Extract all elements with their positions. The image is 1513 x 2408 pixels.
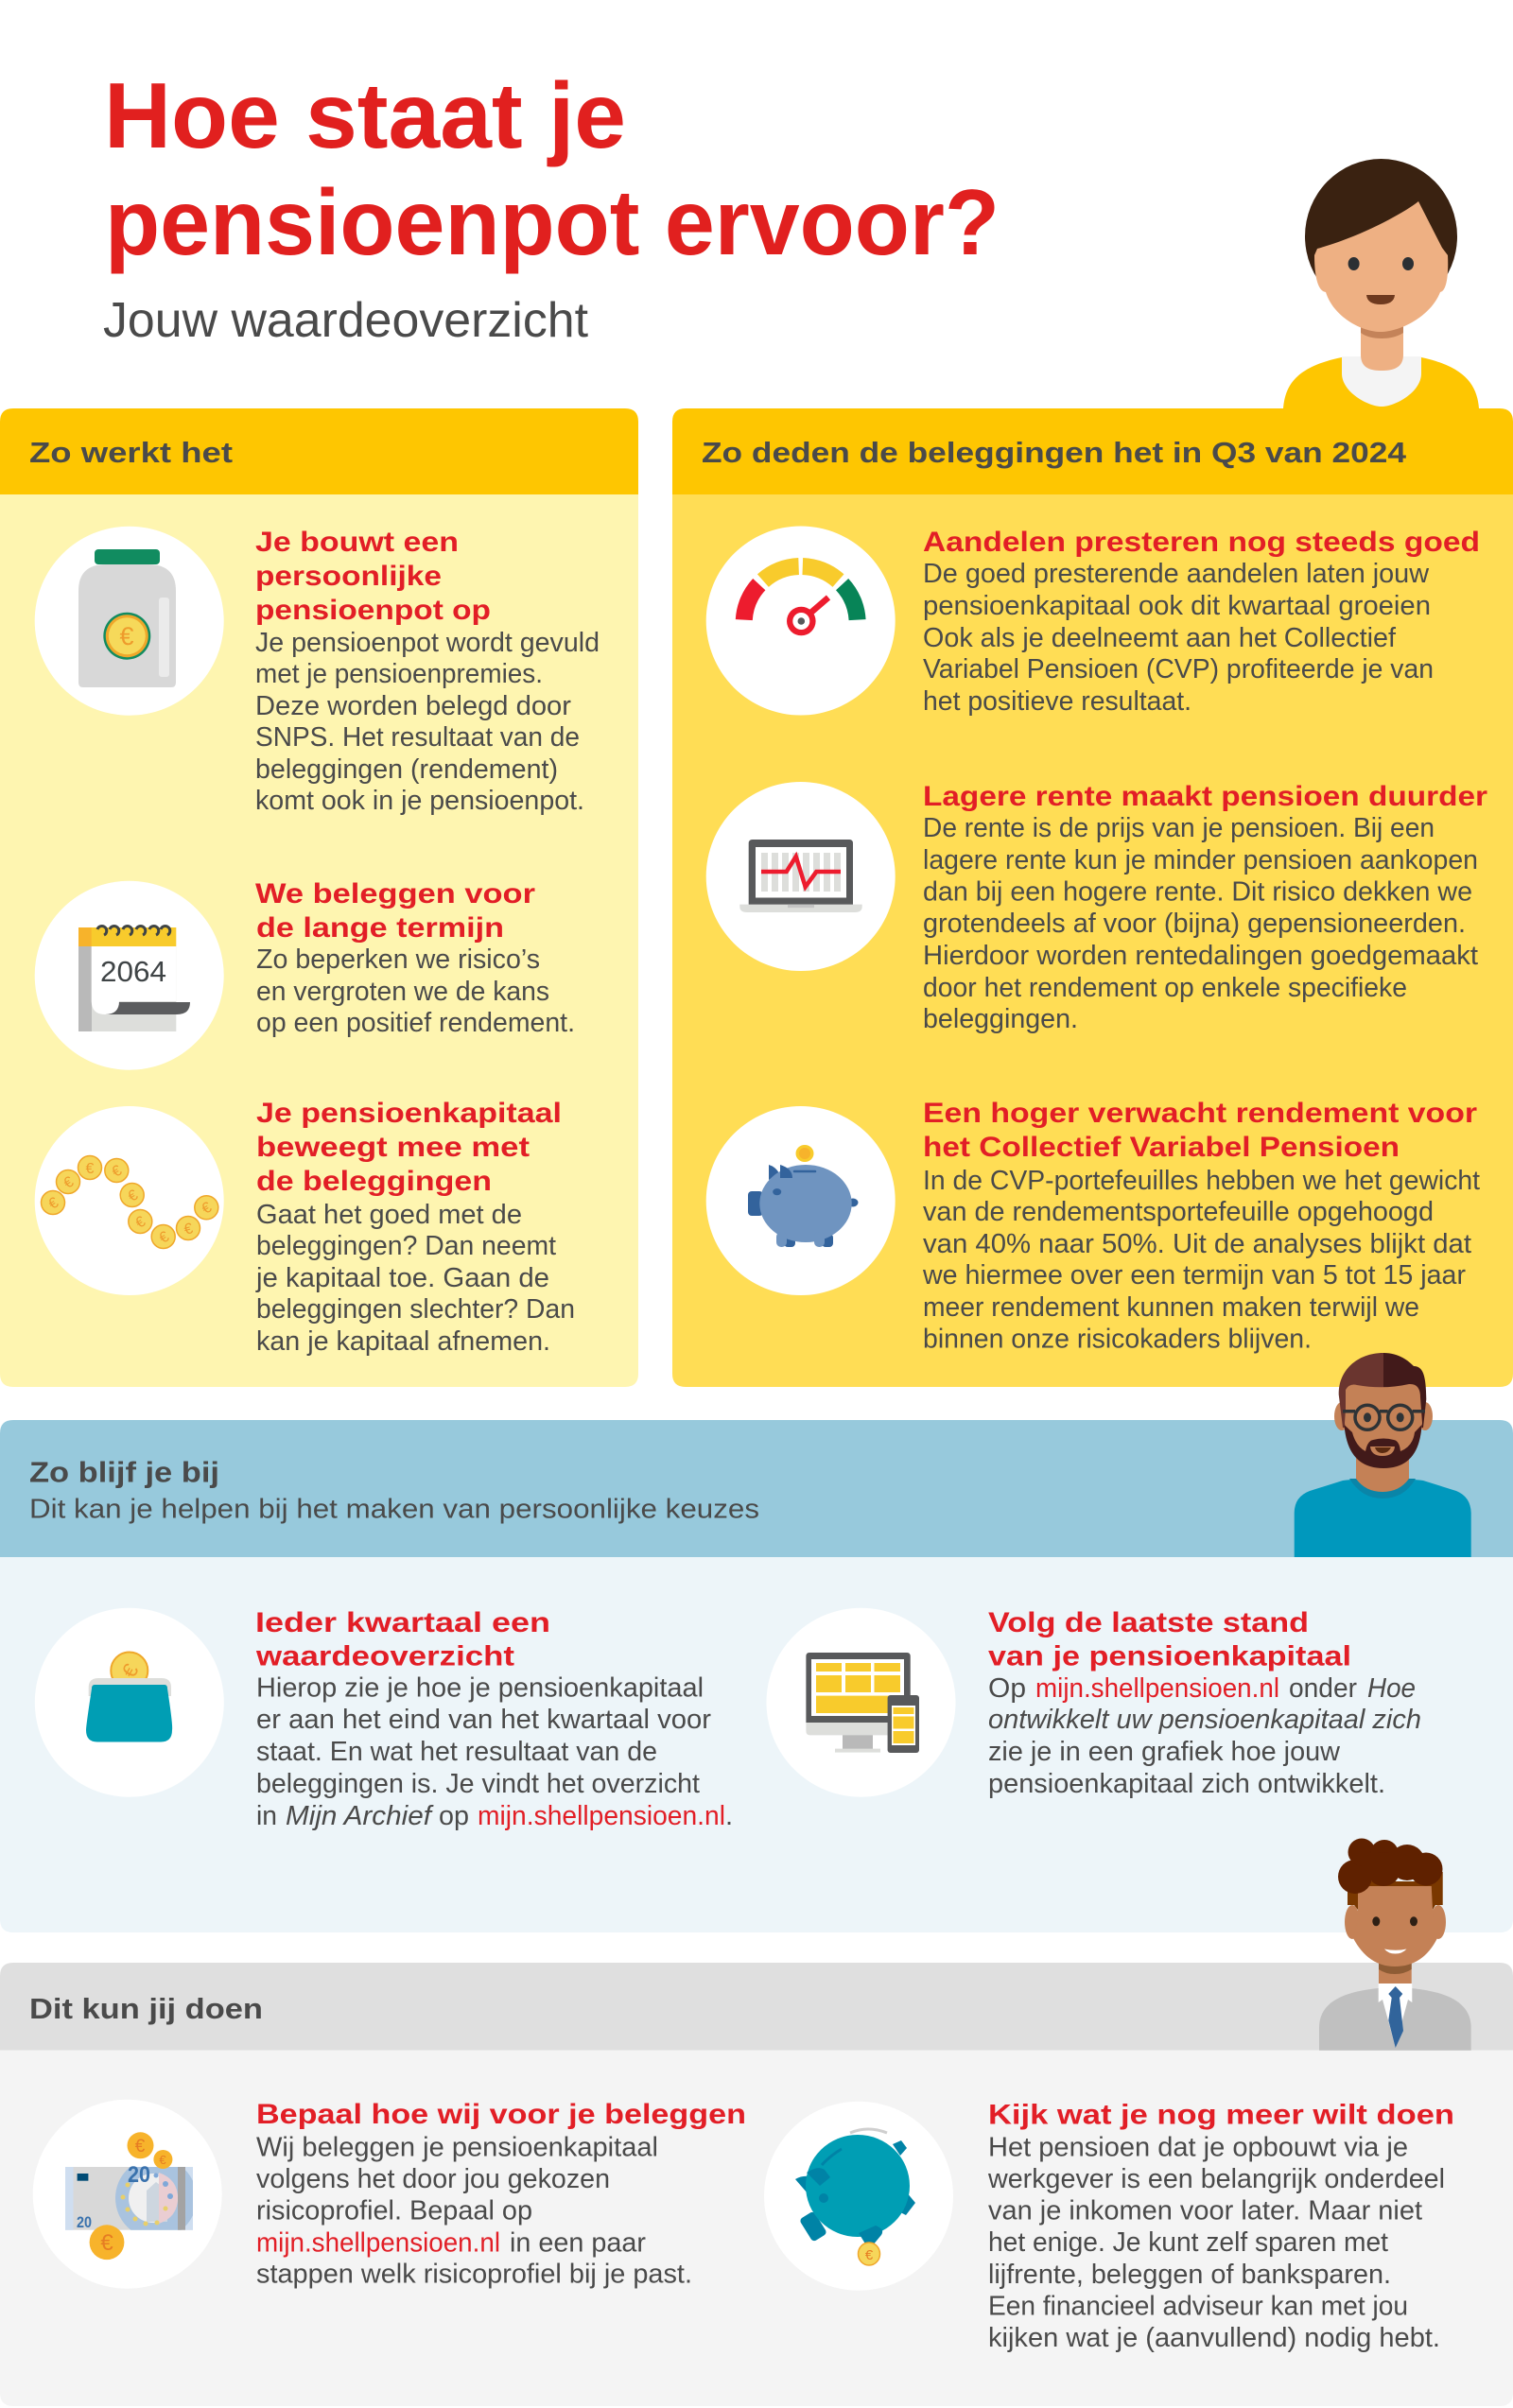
text block: ieder kwartaal een waardeoverzicht: er aan het eind van het kwartaal voor: [256, 1705, 711, 1735]
text block: bepaal hoe wij voor je beleggen: mijn.shellpensioen.nl: [256, 2227, 500, 2258]
text block: kijk wat je nog meer wilt doen: van je inkomen voor later. Maar niet: [988, 2195, 1422, 2226]
text block: volg de laatste stand: pensioenkapitaal zich ontwikkelt.: [988, 1769, 1385, 1799]
text block: je bouwt een persoonlijke pensioenpot op: komt ook in je pensioenpot.: [255, 786, 584, 816]
text block: volg de laatste stand: van je pensioenkapitaal: [988, 1641, 1351, 1672]
title: pensioenpot ervoor?: [105, 170, 1000, 274]
icon: upside-down teal piggy bank: [764, 2102, 953, 2291]
text block: een hoger verwacht rendement: binnen onze risicokaders blijven.: [923, 1324, 1312, 1354]
text block: bepaal hoe wij voor je beleggen: stappen welk risicoprofiel bij je past.: [256, 2260, 692, 2290]
text block: aandelen presteren nog steeds goed: [923, 527, 1480, 717]
text block: we beleggen voor de lange termijn: Zo beperken we risico’s: [256, 944, 540, 975]
text block: lagere rente maakt pensioen duurder: Lagere rente maakt pensioen duurder: [923, 781, 1487, 812]
panel header: zo deden de beleggingen het in q3 van 2024: [672, 408, 1513, 494]
icon: wave of euro coins: €: [61, 1174, 77, 1192]
panel header: zo blijf je bij: Zo blijf je bij: [29, 1456, 219, 1488]
icon: upside-down teal piggy bank: €: [865, 2247, 874, 2263]
panel body background: [672, 494, 1513, 1387]
text block: een hoger verwacht rendement: meer rendement kunnen maken terwijl we: [923, 1292, 1419, 1323]
text block: we beleggen voor de lange termijn: [255, 878, 575, 1038]
text block: lagere rente maakt pensioen duurder: beleggingen.: [923, 1004, 1078, 1034]
icon: twenty euro note with coins: 20: [77, 2213, 92, 2231]
text block: ieder kwartaal een waardeoverzicht: staat. En wat het resultaat van de: [256, 1737, 657, 1767]
text block: kijk wat je nog meer wilt doen: [987, 2099, 1454, 2353]
icon: jar with coin: €: [119, 622, 134, 650]
panel body background: [0, 494, 638, 1387]
text block: je pensioenkapitaal beweegt mee: [255, 1098, 575, 1357]
text block: je pensioenkapitaal beweegt mee: je kapitaal toe. Gaan de: [255, 1263, 549, 1293]
icon: wave of euro coins: €: [126, 1187, 141, 1205]
icon: twenty euro note with coins: €: [159, 2153, 166, 2167]
panel header: dit kun jij doen: [0, 1963, 1513, 2051]
panel: dit kun jij doen: [0, 1963, 1513, 2406]
subtitle: Jouw waardeoverzicht: [103, 293, 589, 348]
text block: een hoger verwacht rendement: het Collectief Variabel Pensioen: [923, 1132, 1400, 1163]
icon: twenty euro note with coins: €: [100, 2230, 113, 2256]
text block: kijk wat je nog meer wilt doen: Het pensioen dat je opbouwt via je: [988, 2133, 1408, 2163]
panel header: zo blijf je bij: [0, 1420, 1513, 1557]
text block: je bouwt een persoonlijke pensioenpot op: pensioenpot op: [255, 595, 491, 626]
panel header: zo deden de beleggingen het in q3 van 2024: Zo deden de beleggingen het in Q3 van 2024: [702, 436, 1407, 469]
text block: bepaal hoe wij voor je beleggen: [256, 2099, 746, 2290]
text block: kijk wat je nog meer wilt doen: lijfrente, beleggen of banksparen.: [988, 2260, 1391, 2290]
text block: je pensioenkapitaal beweegt mee: beleggingen? Dan neemt: [256, 1231, 556, 1261]
text block: lagere rente maakt pensioen duurder: Hierdoor worden rentedalingen goedgemaakt: [923, 941, 1478, 971]
text block: je pensioenkapitaal beweegt mee: beweegt mee met: [256, 1132, 530, 1163]
panel: zo werkt het: [0, 408, 638, 1387]
text block: volg de laatste stand: zie je in een grafiek hoe jouw: [988, 1737, 1341, 1767]
text block: volg de laatste stand: onder: [1289, 1673, 1357, 1704]
text block: een hoger verwacht rendement: van de rendementsportefeuille opgehoogd: [923, 1197, 1434, 1227]
text block: kijk wat je nog meer wilt doen: kijken wat je (aanvullend) nodig hebt.: [988, 2323, 1440, 2353]
text block: lagere rente maakt pensioen duurder: [923, 781, 1487, 1034]
icon: monitor and phone: [766, 1608, 955, 1797]
text block: aandelen presteren nog steeds goed: pensioenkapitaal ook dit kwartaal groeien: [923, 591, 1431, 621]
text block: je bouwt een persoonlijke pensioenpot op: Je bouwt een: [255, 527, 459, 558]
icon: wave of euro coins: [35, 1106, 224, 1295]
text block: volg de laatste stand: [988, 1607, 1421, 1799]
text block: je pensioenkapitaal beweegt mee: beleggingen slechter? Dan: [256, 1294, 575, 1325]
icon: wave of euro coins: €: [110, 1163, 125, 1181]
text block: volg de laatste stand: Volg de laatste stand: [988, 1607, 1309, 1638]
text block: lagere rente maakt pensioen duurder: grotendeels af voor (bijna) gepensioneerden.: [923, 909, 1466, 939]
text block: een hoger verwacht rendement: Een hoger verwacht rendement voor: [923, 1098, 1477, 1129]
text block: lagere rente maakt pensioen duurder: door het rendement op enkele specifieke: [923, 973, 1407, 1003]
text block: je pensioenkapitaal beweegt mee: Gaat het goed met de: [256, 1200, 522, 1230]
text block: je bouwt een persoonlijke pensioenpot op: Je pensioenpot wordt gevuld: [255, 628, 600, 658]
panel header: zo werkt het: [0, 408, 638, 494]
text block: een hoger verwacht rendement: [922, 1098, 1480, 1354]
text block: lagere rente maakt pensioen duurder: dan bij een hogere rente. Dit risico dekken we: [923, 877, 1472, 908]
text block: je bouwt een persoonlijke pensioenpot op: met je pensioenpremies.: [255, 659, 543, 689]
text block: een hoger verwacht rendement: van 40% naar 50%. Uit de analyses blijkt dat: [923, 1229, 1471, 1259]
text block: volg de laatste stand: Hoe: [1367, 1673, 1416, 1704]
icon: jar with coin: [35, 527, 224, 716]
text block: bepaal hoe wij voor je beleggen: in een paar: [510, 2227, 646, 2258]
character: man with glasses and beard: [1295, 1353, 1471, 1557]
text block: je bouwt een persoonlijke pensioenpot op: beleggingen (rendement): [255, 754, 558, 785]
text block: ieder kwartaal een waardeoverzicht: beleggingen is. Je vindt het overzicht: [256, 1769, 700, 1799]
text block: bepaal hoe wij voor je beleggen: risicoprofiel. Bepaal op: [256, 2195, 532, 2226]
text block: aandelen presteren nog steeds goed: Ook als je deelneemt aan het Collectief: [923, 623, 1397, 653]
text block: je pensioenkapitaal beweegt mee: kan je kapitaal afnemen.: [256, 1326, 550, 1357]
text block: ieder kwartaal een waardeoverzicht: op: [439, 1801, 469, 1831]
text block: je bouwt een persoonlijke pensioenpot op: [255, 527, 600, 816]
icon: wave of euro coins: €: [200, 1200, 215, 1218]
text block: kijk wat je nog meer wilt doen: werkgever is een belangrijk onderdeel: [987, 2164, 1445, 2194]
text block: ieder kwartaal een waardeoverzicht: waardeoverzicht: [255, 1641, 514, 1672]
icon: teal purse with coin: [35, 1608, 224, 1797]
icon: wave of euro coins: €: [183, 1221, 195, 1239]
text block: kijk wat je nog meer wilt doen: Een financieel adviseur kan met jou: [988, 2292, 1408, 2322]
icon: wave of euro coins: €: [133, 1214, 148, 1232]
text block: we beleggen voor de lange termijn: op een positief rendement.: [256, 1008, 575, 1038]
icon: wave of euro coins: €: [157, 1229, 172, 1247]
panel header: zo blijf je bij: Dit kan je helpen bij het maken van persoonlijke keuzes: [29, 1494, 759, 1524]
icon: twenty euro note with coins: €: [135, 2137, 146, 2157]
icon: calendar 2064: [35, 881, 224, 1070]
icon: twenty euro note with coins: 20: [128, 2162, 150, 2188]
text block: lagere rente maakt pensioen duurder: De rente is de prijs van je pensioen. Bij een: [923, 813, 1435, 843]
text block: volg de laatste stand: Op: [988, 1673, 1026, 1704]
character: woman: [1283, 159, 1479, 408]
icon: teal purse with coin: €: [117, 1660, 143, 1682]
text block: ieder kwartaal een waardeoverzicht: Hierop zie je hoe je pensioenkapitaal: [256, 1673, 704, 1704]
panel header: zo werkt het: Zo werkt het: [29, 436, 233, 469]
text block: ieder kwartaal een waardeoverzicht: in: [256, 1801, 277, 1831]
icon: wave of euro coins: €: [86, 1161, 95, 1177]
text block: volg de laatste stand: mijn.shellpensioen.nl: [1035, 1673, 1279, 1704]
panel body background: [0, 2051, 1513, 2406]
title: Hoe staat je: [104, 63, 626, 167]
text block: we beleggen voor de lange termijn: en vergroten we de kans: [256, 977, 549, 1007]
text block: je bouwt een persoonlijke pensioenpot op: SNPS. Het resultaat van de: [255, 722, 580, 753]
text block: bepaal hoe wij voor je beleggen: Wij beleggen je pensioenkapitaal: [256, 2133, 658, 2163]
text block: ieder kwartaal een waardeoverzicht: Mijn Archief: [286, 1801, 434, 1831]
text block: we beleggen voor de lange termijn: We beleggen voor: [255, 878, 535, 909]
panel header: dit kun jij doen: Dit kun jij doen: [29, 1992, 263, 2025]
text block: aandelen presteren nog steeds goed: Aandelen presteren nog steeds goed: [923, 527, 1480, 558]
panel: zo deden de beleggingen het: [672, 408, 1513, 1387]
text block: aandelen presteren nog steeds goed: De goed presterende aandelen laten jouw: [923, 559, 1430, 589]
icon: blue piggy bank: [706, 1106, 896, 1295]
text block: bepaal hoe wij voor je beleggen: Bepaal hoe wij voor je beleggen: [256, 2099, 746, 2130]
text block: een hoger verwacht rendement: we hiermee over een termijn van 5 tot 15 jaar: [922, 1260, 1466, 1291]
title: [104, 63, 1000, 274]
panel body background: [0, 1557, 1513, 1932]
icon: twenty euro note with coins: [33, 2100, 222, 2289]
text block: lagere rente maakt pensioen duurder: lagere rente kun je minder pensioen aankopen: [923, 845, 1478, 875]
text block: ieder kwartaal een waardeoverzicht: [255, 1607, 733, 1831]
text block: ieder kwartaal een waardeoverzicht: .: [725, 1801, 733, 1831]
text block: ieder kwartaal een waardeoverzicht: mijn.shellpensioen.nl: [478, 1801, 725, 1831]
text block: kijk wat je nog meer wilt doen: Kijk wat je nog meer wilt doen: [988, 2099, 1454, 2131]
text block: aandelen presteren nog steeds goed: het positieve resultaat.: [923, 686, 1191, 717]
text block: aandelen presteren nog steeds goed: Variabel Pensioen (CVP) profiteerde je van: [923, 654, 1434, 684]
text block: je bouwt een persoonlijke pensioenpot op: Deze worden belegd door: [255, 691, 571, 721]
text block: kijk wat je nog meer wilt doen: het enige. Je kunt zelf sparen met: [988, 2227, 1388, 2258]
text block: een hoger verwacht rendement: In de CVP-portefeuilles hebben we het gewicht: [923, 1166, 1480, 1196]
icon: wave of euro coins: €: [46, 1195, 61, 1213]
text block: we beleggen voor de lange termijn: de lange termijn: [256, 912, 504, 944]
text block: je pensioenkapitaal beweegt mee: de beleggingen: [256, 1166, 492, 1197]
icon: calendar 2064: 2064: [100, 955, 166, 988]
icon: gauge meter: [706, 526, 896, 715]
text block: je pensioenkapitaal beweegt mee: Je pensioenkapitaal: [256, 1098, 562, 1129]
text block: je bouwt een persoonlijke pensioenpot op: persoonlijke: [255, 561, 442, 592]
text block: ieder kwartaal een waardeoverzicht: Ieder kwartaal een: [255, 1607, 550, 1638]
icon: laptop with chart: [706, 782, 896, 971]
character: man in grey suit with blue tie: [1319, 1838, 1471, 2051]
text block: bepaal hoe wij voor je beleggen: volgens het door jou gekozen: [256, 2164, 610, 2194]
panel: zo blijf je bij: [0, 1420, 1513, 1932]
text block: volg de laatste stand: ontwikkelt uw pensioenkapitaal zich: [988, 1705, 1421, 1735]
